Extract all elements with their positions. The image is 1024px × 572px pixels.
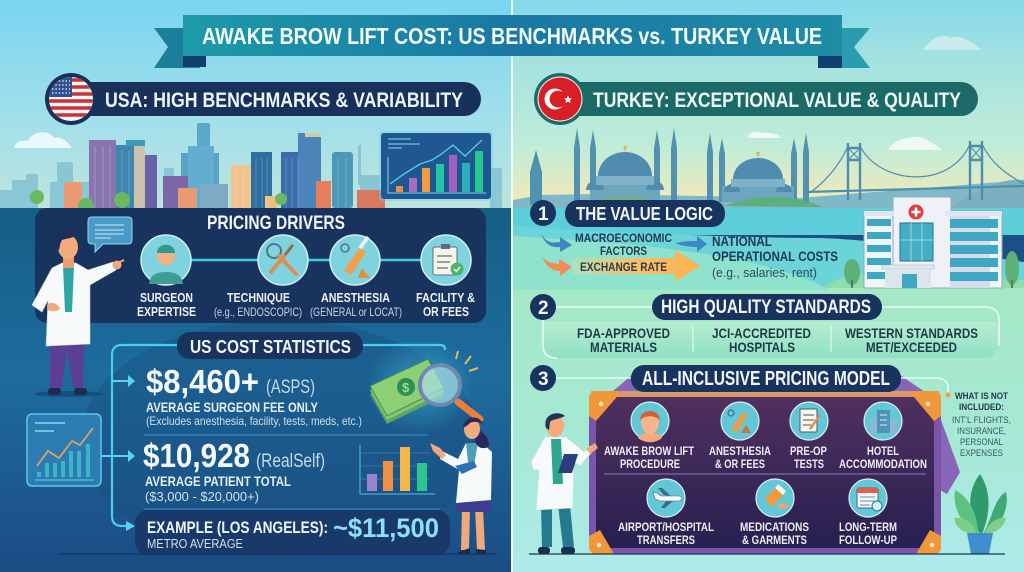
illustration: potted plant — [954, 474, 1007, 554]
driver labels — [137, 290, 475, 319]
section 2: high quality standards: JCI-ACCREDITED — [712, 325, 811, 341]
section 2: high quality standards — [530, 294, 999, 358]
icon: money and magnifier — [365, 337, 480, 433]
board labels: FOLLOW-UP — [839, 535, 897, 547]
board labels: & GARMENTS — [742, 535, 807, 547]
section 1: the value logic: EXCHANGE RATE — [580, 260, 667, 274]
callout: what is not included: INCLUDED: — [959, 402, 1004, 413]
driver labels: TECHNIQUE — [227, 290, 290, 305]
section 2: high quality standards: HIGH QUALITY STANDARDS — [661, 297, 871, 318]
icon: pre-op clipboard — [790, 402, 828, 440]
heading: Turkey: TURKEY: EXCEPTIONAL VALUE & QUALITY — [593, 89, 961, 112]
section 1: the value logic: MACROECONOMIC — [575, 231, 672, 245]
section 2: high quality standards: MET/EXCEEDED — [866, 339, 957, 355]
driver labels: (e.g., ENDOSCOPIC) — [214, 305, 302, 319]
icon: airplane — [647, 479, 685, 517]
driver labels: (GENERAL or LOCAT) — [310, 305, 402, 319]
background: USA side — [0, 0, 511, 572]
board labels: AWAKE BROW LIFT — [604, 446, 694, 458]
board labels: PRE-OP — [790, 446, 827, 458]
board labels: TESTS — [794, 459, 824, 471]
board labels: TRANSFERS — [637, 535, 695, 547]
stat: surgeon fee: AVERAGE SURGEON FEE ONLY — [146, 399, 319, 415]
arrow: to national costs — [675, 236, 707, 252]
board labels: & OR FEES — [715, 459, 765, 471]
stat: surgeon fee: (Excludes anesthesia, facility, tests, meds, etc.) — [146, 414, 362, 428]
chart: bar chart — [360, 445, 435, 494]
section 1: the value logic — [530, 200, 838, 282]
board labels: PROCEDURE — [620, 459, 680, 471]
driver labels: FACILITY & — [416, 290, 475, 305]
callout: what is not included: INT'L FLIGHTS, — [952, 415, 1011, 426]
heading: all-inclusive pricing: 3 — [538, 369, 549, 390]
callout: what is not included: WHAT IS NOT — [955, 391, 1008, 402]
icon: clipboard — [421, 235, 471, 285]
arrow: big orange — [572, 250, 700, 282]
background: Turkey side — [511, 0, 1024, 572]
section 2: high quality standards: FDA-APPROVED — [577, 325, 670, 341]
driver labels: EXPERTISE — [137, 304, 196, 319]
chart card: trend — [27, 414, 101, 486]
board labels: ACCOMMODATION — [839, 459, 927, 471]
section 2: high quality standards: MATERIALS — [590, 339, 657, 355]
stat: Los Angeles example: METRO AVERAGE — [147, 536, 243, 551]
board labels: ANESTHESIA — [709, 446, 771, 458]
board labels — [604, 446, 927, 547]
section 1: the value logic: THE VALUE LOGIC — [576, 204, 713, 224]
heading: USA — [45, 73, 481, 125]
icon: Turkey flag — [538, 77, 582, 121]
icon: hotel — [864, 402, 902, 440]
icon: instruments — [258, 235, 308, 285]
cloud: USA sky — [14, 132, 72, 148]
panel: pricing drivers — [35, 208, 486, 323]
chart card: skyline growth chart — [379, 131, 493, 201]
stat: patient total — [143, 437, 325, 504]
heading: US cost statistics — [112, 332, 445, 526]
arrow: macroeconomic — [541, 233, 572, 252]
section 2: high quality standards: 2 — [538, 298, 549, 319]
hospital illustration — [822, 197, 1024, 288]
icon: surgeon — [141, 235, 191, 285]
panel: pricing drivers: PRICING DRIVERS — [207, 213, 345, 234]
stat: Los Angeles example — [135, 510, 450, 555]
arrows: statistics bracket — [101, 375, 135, 531]
illustration: doctor pointing — [32, 232, 124, 397]
section 2: high quality standards: WESTERN STANDARDS — [845, 325, 978, 341]
stat: patient total: $10,928 — [143, 437, 250, 474]
heading: USA: USA: HIGH BENCHMARKS & VARIABILITY — [105, 89, 463, 112]
icon: speech bubble — [88, 217, 132, 252]
skyline: USA city — [0, 123, 502, 214]
illustration: doctor with clipboard — [531, 413, 598, 554]
drape behind pricing board — [612, 375, 960, 494]
section 1: the value logic: OPERATIONAL COSTS — [712, 248, 838, 264]
callout: what is not included: PERSONAL — [960, 437, 1003, 448]
arrow: exchange rate — [542, 257, 572, 276]
section 1: the value logic: 1 — [538, 204, 549, 225]
stat: patient total: AVERAGE PATIENT TOTAL — [145, 473, 291, 489]
stat: patient total: ($3,000 - $20,000+) — [145, 489, 259, 504]
section 1: the value logic: FACTORS — [600, 244, 647, 258]
stat: surgeon fee: (ASPS) — [266, 377, 315, 398]
illustration: woman doctor — [430, 417, 492, 554]
icon: anesthesia — [330, 235, 380, 285]
stat: surgeon fee: $8,460+ — [146, 363, 259, 400]
icon: medication — [756, 479, 794, 517]
icon: calendar — [849, 479, 887, 517]
board labels: AIRPORT/HOSPITAL — [618, 522, 714, 534]
section 1: the value logic: (e.g., salaries, rent) — [712, 265, 817, 280]
board labels: HOTEL — [867, 446, 899, 458]
stat: patient total: (RealSelf) — [256, 451, 325, 472]
section 2: high quality standards: HOSPITALS — [729, 339, 795, 355]
heading: Turkey — [534, 73, 978, 125]
driver labels: ANESTHESIA — [321, 290, 390, 305]
title banner — [154, 15, 870, 68]
callout: what is not included: EXPENSES — [960, 448, 1003, 459]
icon: US flag — [49, 77, 93, 121]
title banner: AWAKE BROW LIFT COST: US BENCHMARKS vs. TURKEY VALUE — [202, 23, 822, 49]
heading: all-inclusive pricing — [530, 365, 948, 392]
stat: Los Angeles example: EXAMPLE (LOS ANGELES): — [147, 518, 328, 537]
board labels: LONG-TERM — [839, 522, 897, 534]
section 1: the value logic: NATIONAL — [712, 233, 772, 249]
icon: face — [631, 402, 669, 442]
board labels: MEDICATIONS — [740, 522, 809, 534]
heading: US cost statistics: US COST STATISTICS — [190, 336, 351, 357]
icon: vial — [721, 402, 759, 440]
section 3: pricing board — [589, 391, 941, 554]
stat: Los Angeles example: ~$11,500 — [333, 513, 439, 543]
callout: what is not included — [946, 391, 1011, 459]
driver labels: SURGEON — [140, 290, 193, 305]
skyline: Istanbul — [513, 36, 1024, 208]
icon: money and magnifier: $ — [402, 380, 410, 395]
heading: all-inclusive pricing: ALL-INCLUSIVE PRICING MODEL — [642, 368, 890, 390]
stat: surgeon fee — [146, 363, 362, 428]
driver labels: OR FEES — [423, 304, 469, 319]
callout: what is not included: INSURANCE, — [957, 426, 1006, 437]
